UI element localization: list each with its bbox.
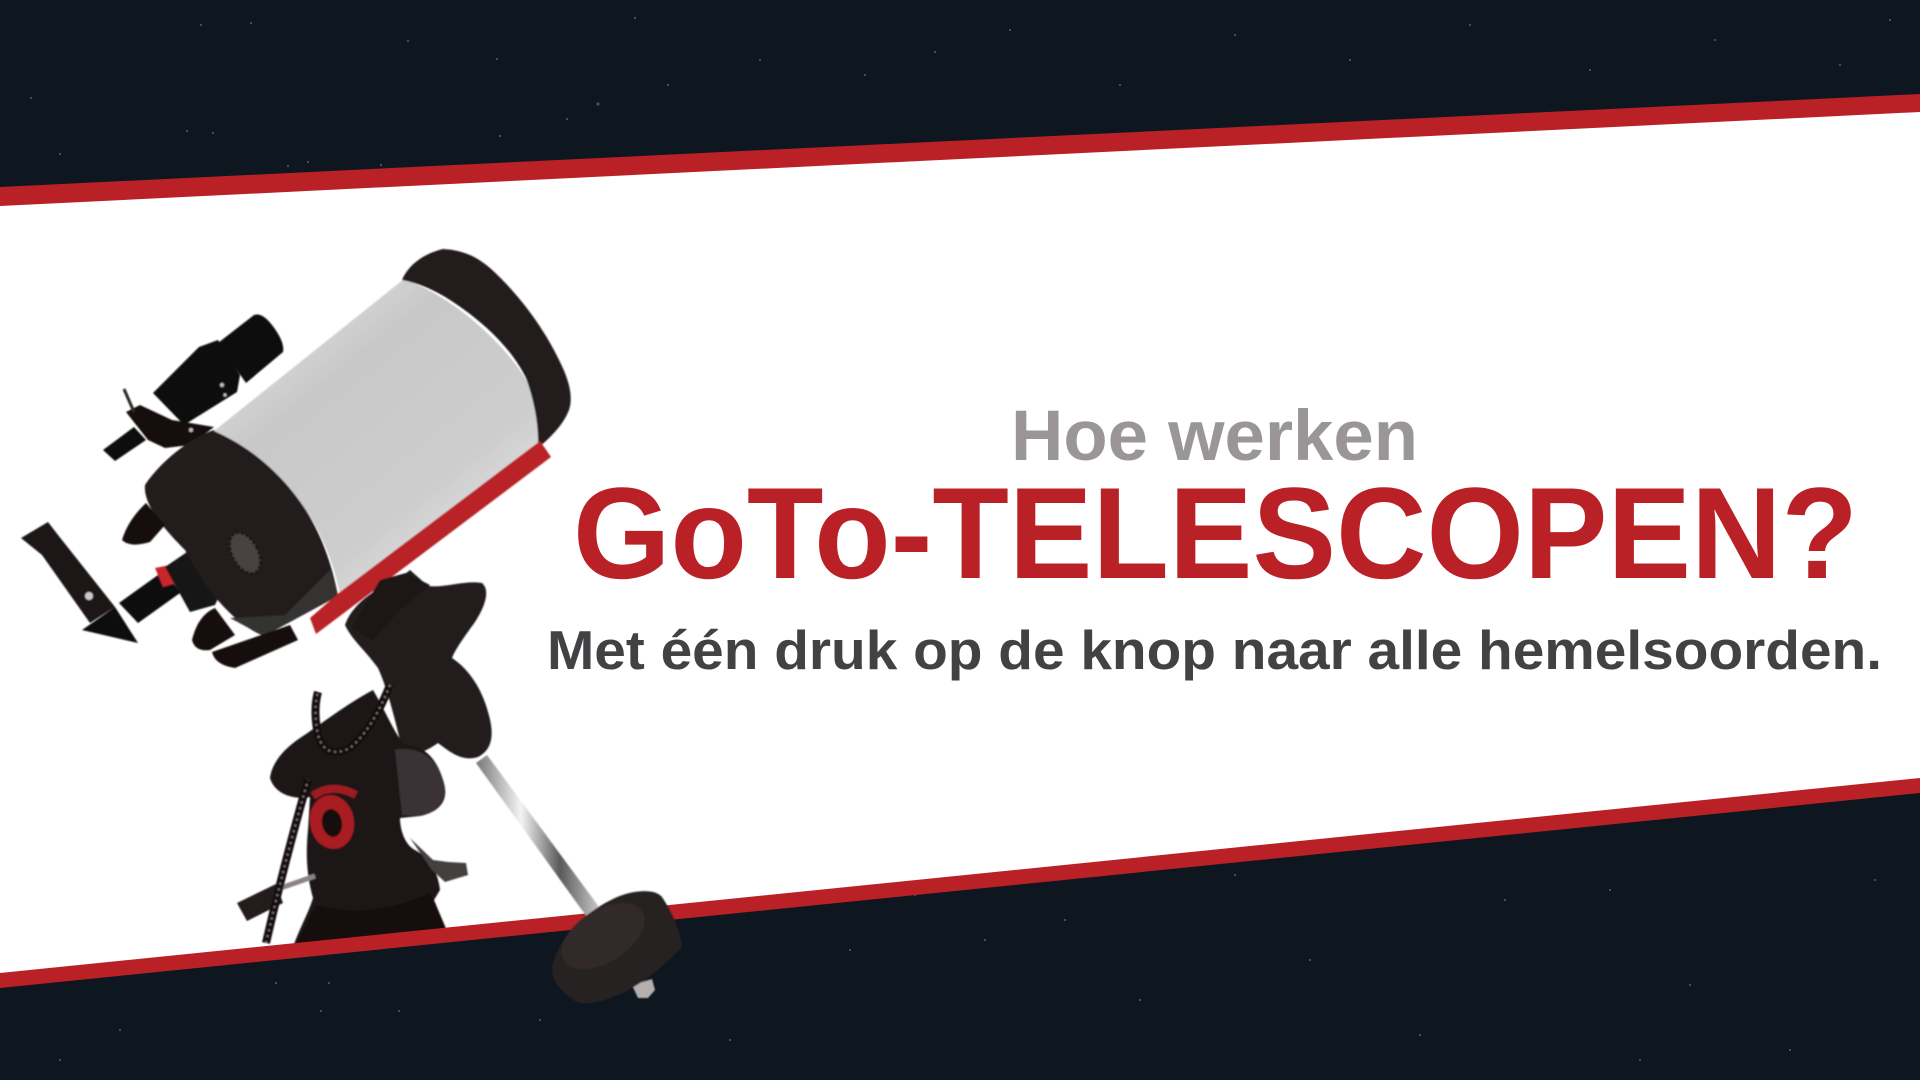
white tube body [214,279,540,595]
dew shield [402,249,571,448]
counterweight shaft [476,755,605,924]
lighter motor housing [395,749,444,816]
bottom red diagonal band [0,778,1920,988]
rear cell [145,430,338,636]
mount body [270,690,450,956]
rear cell focus knob [165,550,222,612]
tripod hub [290,893,450,956]
counterweight face highlight [550,890,656,982]
title: GoTo-TELESCOPEN?: GoTo-TELESCOPEN? [573,460,1858,606]
subtitle: Met één druk op de knop naar alle hemelsoorden. [547,619,1882,681]
telescope optical tube and mount [21,249,571,956]
azimuth knob [410,838,468,882]
counterweight screw [632,979,655,998]
saddle clamp knobs [352,573,430,640]
top red diagonal band [0,94,1920,206]
altitude handle [237,876,315,921]
red dovetail rail [310,441,551,634]
rear cell vent [223,527,267,579]
finderscope [103,314,283,461]
red latitude ring [306,789,358,852]
heading: Hoe werken: Hoe werken [1011,397,1418,476]
counterweight shaft and weight [476,755,682,1003]
counterweight [552,891,682,1003]
rear cell lower shade [230,570,338,636]
hand controller cables [266,685,390,943]
white diagonal panel [0,111,1920,975]
mount head and declination axis [345,570,492,758]
rear cell knobs [122,503,298,668]
eyepiece and star diagonal [21,522,180,643]
